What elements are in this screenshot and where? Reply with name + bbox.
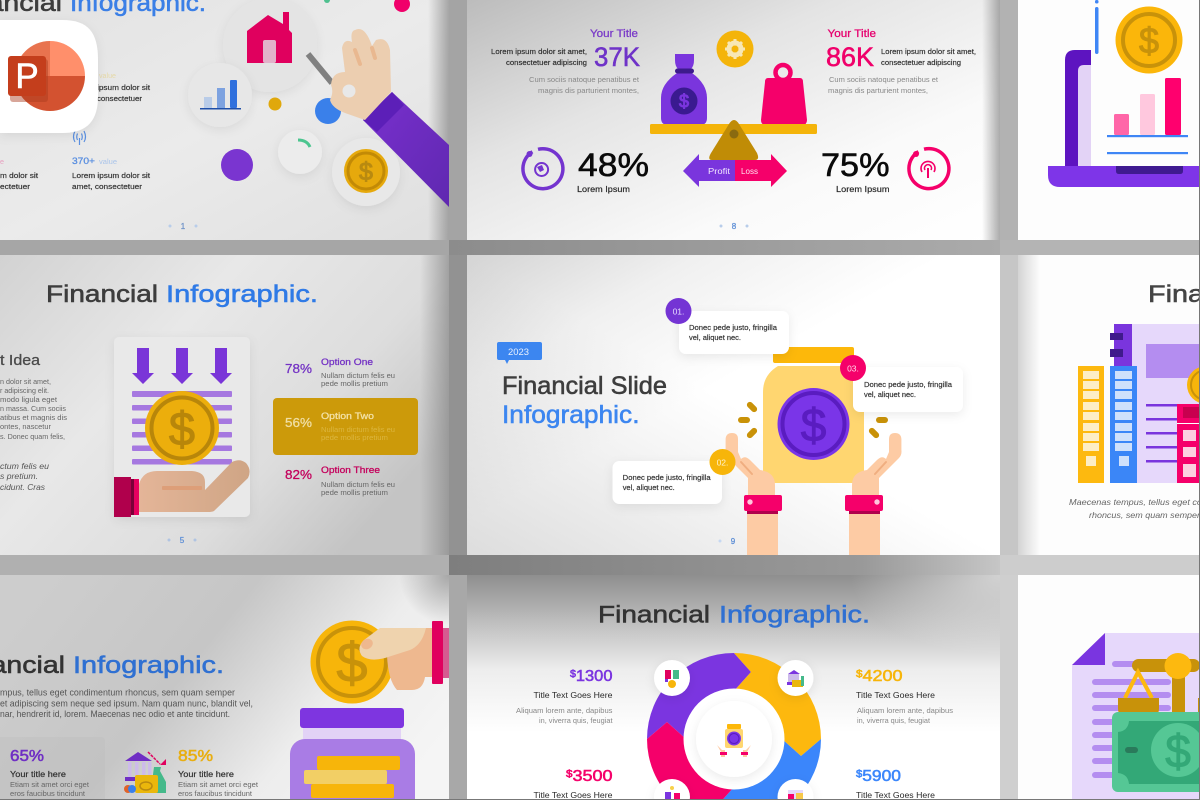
callout 02: 02. — [717, 458, 728, 468]
pagination 5: 5 — [180, 536, 185, 545]
icon: gear — [716, 30, 754, 68]
icon: bank badge — [778, 660, 814, 696]
icon: money bag: $ — [679, 92, 689, 112]
icon: bank with money — [124, 752, 166, 793]
icon: weight — [761, 65, 807, 125]
icon: banknote — [1112, 712, 1200, 792]
stat 85 percent: eros faucibus tincidunt — [178, 789, 253, 798]
option one: pede mollis pretium — [321, 379, 388, 388]
icon: coin — [145, 391, 219, 465]
option three: 82% — [285, 467, 312, 482]
arrows down — [132, 348, 232, 384]
icon: team badge — [654, 660, 690, 696]
idea text block: ontes, nascetur — [0, 422, 51, 431]
icon: balance scale — [1118, 653, 1199, 712]
body paragraph — [0, 688, 253, 719]
left hand — [726, 433, 782, 555]
slide 5 title — [46, 281, 318, 308]
option three: pede mollis pretium — [321, 488, 388, 497]
icon: scale badge — [654, 779, 690, 800]
item 5900: 5900 — [862, 768, 901, 785]
panel: slide 1 financial overview — [0, 0, 449, 240]
chart: four segment donut — [647, 653, 821, 800]
slide title: Infographic. — [719, 602, 870, 628]
icon: PowerPoint logo badge — [0, 20, 98, 133]
item 3500: 3500 — [572, 768, 613, 785]
idea text block: atibus et magnis dis — [0, 413, 67, 422]
slide 1 stat column text: m dolor sit — [0, 171, 39, 180]
icon: gold coin: $ — [336, 631, 368, 694]
icon: coin: $ — [169, 402, 195, 455]
slide 5 title: Financial — [46, 281, 158, 308]
item 4200: Title Text Goes Here — [856, 690, 935, 700]
decorative dots — [221, 0, 410, 181]
option two highlighted — [273, 398, 418, 455]
left title block: Lorem ipsum dolor sit amet, — [491, 47, 587, 56]
idea text block: s pretium. — [0, 472, 38, 481]
stat card 65 percent: eros faucibus tincidunt — [10, 789, 86, 798]
slide title: Financial — [598, 602, 710, 628]
slide 1 stat column text: value — [99, 73, 116, 80]
item 3500 — [534, 768, 613, 800]
illustration: coin and hand over jar — [290, 620, 449, 800]
idea text block: modo ligula eget — [0, 395, 58, 404]
slide title — [0, 655, 222, 678]
callout 02: vel, aliquet nec. — [623, 483, 675, 492]
illustration: laptop — [1048, 50, 1200, 187]
stat 85 percent: Etiam sit amet orci eget — [178, 780, 259, 789]
icon: money bag — [661, 54, 707, 125]
title fragment: Fina — [1148, 281, 1200, 308]
illustration: hand holding pen with sleeve — [308, 29, 449, 207]
year badge — [497, 342, 542, 364]
left title block: 37K — [594, 42, 640, 72]
icon: purple coin: $ — [801, 399, 826, 451]
arrow: profit and loss: Profit — [708, 166, 731, 176]
item 3500: $ — [566, 769, 573, 780]
stat 85 percent: Your title here — [178, 769, 234, 779]
arrow: profit and loss — [683, 154, 787, 187]
icon: signal — [74, 131, 86, 145]
item 5900 — [856, 768, 935, 800]
icon: progress arc — [278, 138, 322, 176]
stat: 75 percent — [821, 145, 953, 194]
option two highlighted: pede mollis pretium — [321, 433, 388, 442]
slide 1 stat column text: consectetuer — [97, 94, 143, 103]
italic caption: rhoncus, sem quam semper — [1089, 510, 1200, 520]
stat card 65 percent — [10, 750, 89, 796]
left title block: Your Title — [590, 28, 638, 40]
item 1300: Title Text Goes Here — [534, 690, 613, 700]
icon: purple coin — [778, 388, 850, 460]
option one — [285, 357, 395, 388]
item 1300: 1300 — [576, 668, 613, 685]
option two highlighted: Nullam dictum felis eu — [321, 425, 395, 434]
icon: PowerPoint logo badge: P — [15, 57, 39, 96]
illustration: document and binders — [1078, 324, 1200, 483]
callout 03: Donec pede justo, fringilla — [864, 380, 953, 389]
item 4200: Aliquam lorem ante, dapibus — [857, 706, 953, 715]
icon: open hand with cuff — [114, 460, 250, 517]
callout 02 — [612, 449, 736, 504]
icon: dollar coin — [332, 149, 400, 209]
right title block — [826, 28, 976, 95]
option three: Nullam dictum felis eu — [321, 480, 395, 489]
pagination 8 — [720, 222, 748, 231]
panel: slide with coin jar — [0, 575, 449, 800]
item 1300: Aliquam lorem ante, dapibus — [516, 706, 613, 715]
idea text block: s. Donec quam felis, — [0, 432, 65, 441]
scale beam and pivot — [650, 120, 817, 160]
stat 85 percent — [178, 748, 259, 798]
option two highlighted: 56% — [285, 415, 312, 430]
slide 1 stat column text: Lorem ipsum dolor sit — [72, 171, 151, 180]
slide title — [598, 602, 870, 628]
item 3500: Title Text Goes Here — [534, 790, 613, 800]
pagination 9 — [718, 537, 736, 546]
icon: center jar with hands — [717, 724, 751, 757]
body paragraph: et adipiscing sem neque sed ipsum. Nam quam nunc, blandit vel, — [0, 698, 253, 708]
main title: Financial Slide — [502, 372, 667, 400]
panel: slide with money and scale — [1018, 575, 1200, 800]
blue binder — [1110, 366, 1137, 483]
right title block: Cum sociis natoque penatibus et — [829, 75, 939, 84]
slide 1 stat column text: ectetuer — [0, 182, 31, 191]
option three — [285, 465, 395, 497]
idea text block: n dolor sit amet, — [0, 377, 51, 386]
option one: Option One — [321, 357, 373, 367]
illustration: document — [1072, 633, 1200, 800]
stat: 48 percent — [519, 145, 649, 194]
panel: slide with laptop chart — [1018, 0, 1200, 240]
text lines — [132, 391, 232, 464]
slide 1 stat column text: e — [0, 159, 4, 166]
italic caption: Maecenas tempus, tellus eget co — [1069, 497, 1200, 507]
left title block: Cum sociis natoque penatibus et — [529, 75, 640, 84]
callout 01 — [666, 298, 789, 354]
item 5900: Title Text Goes Here — [856, 790, 935, 800]
right hand — [845, 433, 902, 555]
callout 01: vel, aliquet nec. — [689, 333, 741, 342]
item 4200: in, viverra quis, feugiat — [857, 716, 931, 725]
panel: slide 5 options — [0, 255, 449, 555]
callout 01: 01. — [673, 306, 684, 316]
pagination 8: 8 — [732, 222, 737, 231]
panel: slide 8 profit and loss scale — [467, 0, 1000, 240]
panel: slide with binders — [1018, 255, 1200, 555]
item 5900: $ — [856, 769, 863, 780]
illustration: jar with coin held by hands — [726, 347, 902, 555]
slide 1 title — [0, 0, 206, 17]
item 4200: $ — [856, 669, 863, 680]
item 4200 — [856, 668, 953, 725]
right title block: consectetuer adipiscing — [881, 58, 961, 67]
panel: slide with donut diagram — [467, 575, 1000, 800]
right title block: magnis dis parturient montes, — [828, 86, 928, 95]
right title block: Your Title — [828, 28, 876, 40]
body paragraph: mpus, tellus eget condimentum rhoncus, sem quam semper — [0, 688, 235, 698]
idea text block — [0, 352, 67, 492]
callout 03: 03. — [847, 364, 859, 374]
main title: Infographic. — [502, 401, 640, 429]
item 4200: 4200 — [862, 668, 903, 685]
option one: Nullam dictum felis eu — [321, 371, 395, 380]
slide 1 stat column text: 370+ — [72, 156, 95, 166]
icon: blue marker — [1095, 0, 1098, 54]
right title block: Lorem ipsum dolor sit amet, — [881, 47, 976, 56]
option two highlighted: Option Two — [321, 411, 374, 421]
idea text block: t Idea — [0, 352, 41, 369]
slide 1 stat column text: value — [99, 159, 117, 166]
pagination 1 — [168, 222, 198, 230]
stat 85 percent: 85% — [178, 748, 213, 765]
icon: dollar coin: $ — [1139, 20, 1159, 61]
option three: Option Three — [321, 465, 380, 475]
callout 01: Donec pede justo, fringilla — [689, 323, 778, 332]
pagination 5 — [168, 536, 196, 545]
body paragraph: nar, hendrerit id, lorem. Maecenas nec odio et ante tincidunt. — [0, 709, 230, 719]
item 1300: in, viverra quis, feugiat — [539, 716, 613, 725]
pagination 1: 1 — [181, 222, 186, 231]
callout 03: vel, aliquet nec. — [864, 390, 916, 399]
left title block — [491, 28, 640, 95]
stat: 75 percent: Lorem Ipsum — [836, 184, 890, 194]
icon: bar chart in circle — [188, 63, 252, 127]
panel: central slide financial slide infographic — [467, 255, 1000, 555]
slide 1 stat column text: ipsum dolor sit — [97, 83, 151, 92]
callout 02: Donec pede justo, fringilla — [623, 473, 712, 482]
icon: banknote: $ — [1165, 725, 1191, 777]
stat: 48 percent: 48% — [578, 147, 649, 183]
stat: 48 percent: Lorem Ipsum — [577, 184, 630, 194]
idea text block: r adipiscing elit. — [0, 386, 49, 395]
year badge: 2023 — [508, 347, 529, 357]
idea text block: n massa. Cum sociis — [0, 404, 66, 413]
icon: dollar coin: $ — [359, 158, 373, 186]
yellow binder — [1078, 366, 1104, 483]
stat card 65 percent: Etiam sit amet orci eget — [10, 780, 90, 789]
idea text block: cidunt. Cras — [0, 483, 45, 492]
arrow: profit and loss: Loss — [741, 166, 758, 176]
stat card 65 percent: Your title here — [10, 769, 66, 779]
icon: dollar coin — [1116, 6, 1182, 74]
option one: 78% — [285, 361, 312, 376]
hand — [359, 621, 449, 690]
right title block: 86K — [826, 42, 874, 72]
icon: document badge — [778, 779, 814, 800]
jar — [763, 347, 864, 483]
slide title: Infographic. — [73, 652, 224, 679]
item 1300: $ — [570, 669, 576, 680]
pagination 9: 9 — [731, 537, 736, 546]
italic caption — [1069, 499, 1199, 520]
item 1300 — [516, 668, 613, 725]
left title block: consectetuer adipiscing — [506, 58, 587, 67]
sparks — [738, 401, 888, 439]
stat: 75 percent: 75% — [821, 147, 890, 183]
main title — [502, 372, 667, 429]
slide 1 stat column text: amet, consectetuer — [72, 182, 143, 191]
illustration: document with coin and hand — [114, 337, 250, 517]
left title block: magnis dis parturient montes, — [538, 86, 639, 95]
slide 5 title: Infographic. — [166, 281, 318, 308]
icon: house in circle — [223, 0, 317, 92]
slide 1 stat column text — [0, 73, 151, 191]
icon: gold coin — [310, 620, 394, 704]
idea text block: ctum felis eu — [0, 462, 50, 471]
callout 03 — [840, 355, 963, 412]
stat card 65 percent: 65% — [10, 748, 44, 765]
bar chart — [1107, 78, 1188, 154]
jar — [290, 708, 415, 800]
